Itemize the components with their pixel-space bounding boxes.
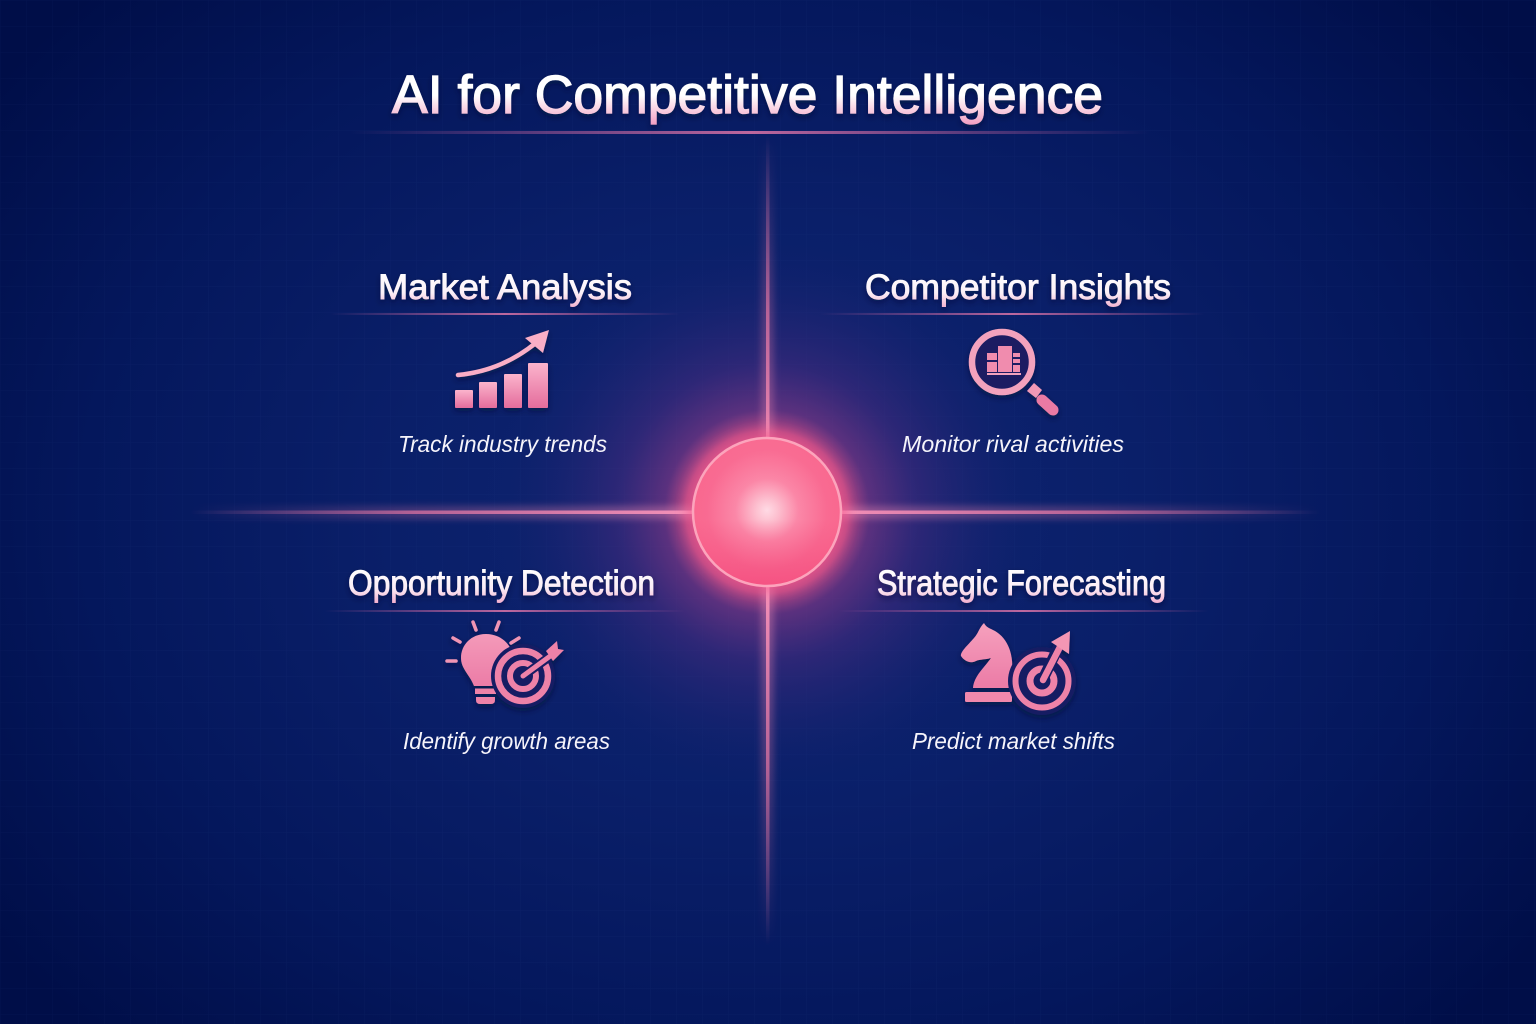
cross connector lines [190, 135, 1320, 945]
description: Identify growth areas [403, 728, 610, 754]
heading: market analysis: Market Analysis [378, 268, 632, 307]
icon: magnifier over bars [972, 332, 1053, 410]
panel: opportunity detection [325, 564, 685, 754]
panel: competitor insights [820, 268, 1205, 457]
heading rule [325, 610, 685, 612]
title underline [350, 131, 1150, 134]
icon: chess knight and target arrow [961, 623, 1076, 715]
heading rule [330, 313, 680, 315]
heading: competitor insights: Competitor Insights [865, 268, 1171, 307]
panel: strategic forecasting [838, 564, 1208, 754]
description: Predict market shifts [912, 728, 1115, 754]
title: AI for Competitive Intelligence [392, 65, 1103, 125]
heading: strategic forecasting: Strategic Forecasting [877, 564, 1166, 603]
central glowing orb [689, 434, 845, 590]
heading: opportunity detection: Opportunity Detection [348, 564, 655, 603]
heading rule [820, 313, 1205, 315]
description: Monitor rival activities [902, 431, 1124, 457]
icon: light bulb and target [447, 622, 564, 708]
description: Track industry trends [398, 431, 607, 457]
icon: rising bar chart with arrow [455, 330, 549, 408]
heading rule [838, 610, 1208, 612]
panel: market analysis [330, 268, 680, 457]
